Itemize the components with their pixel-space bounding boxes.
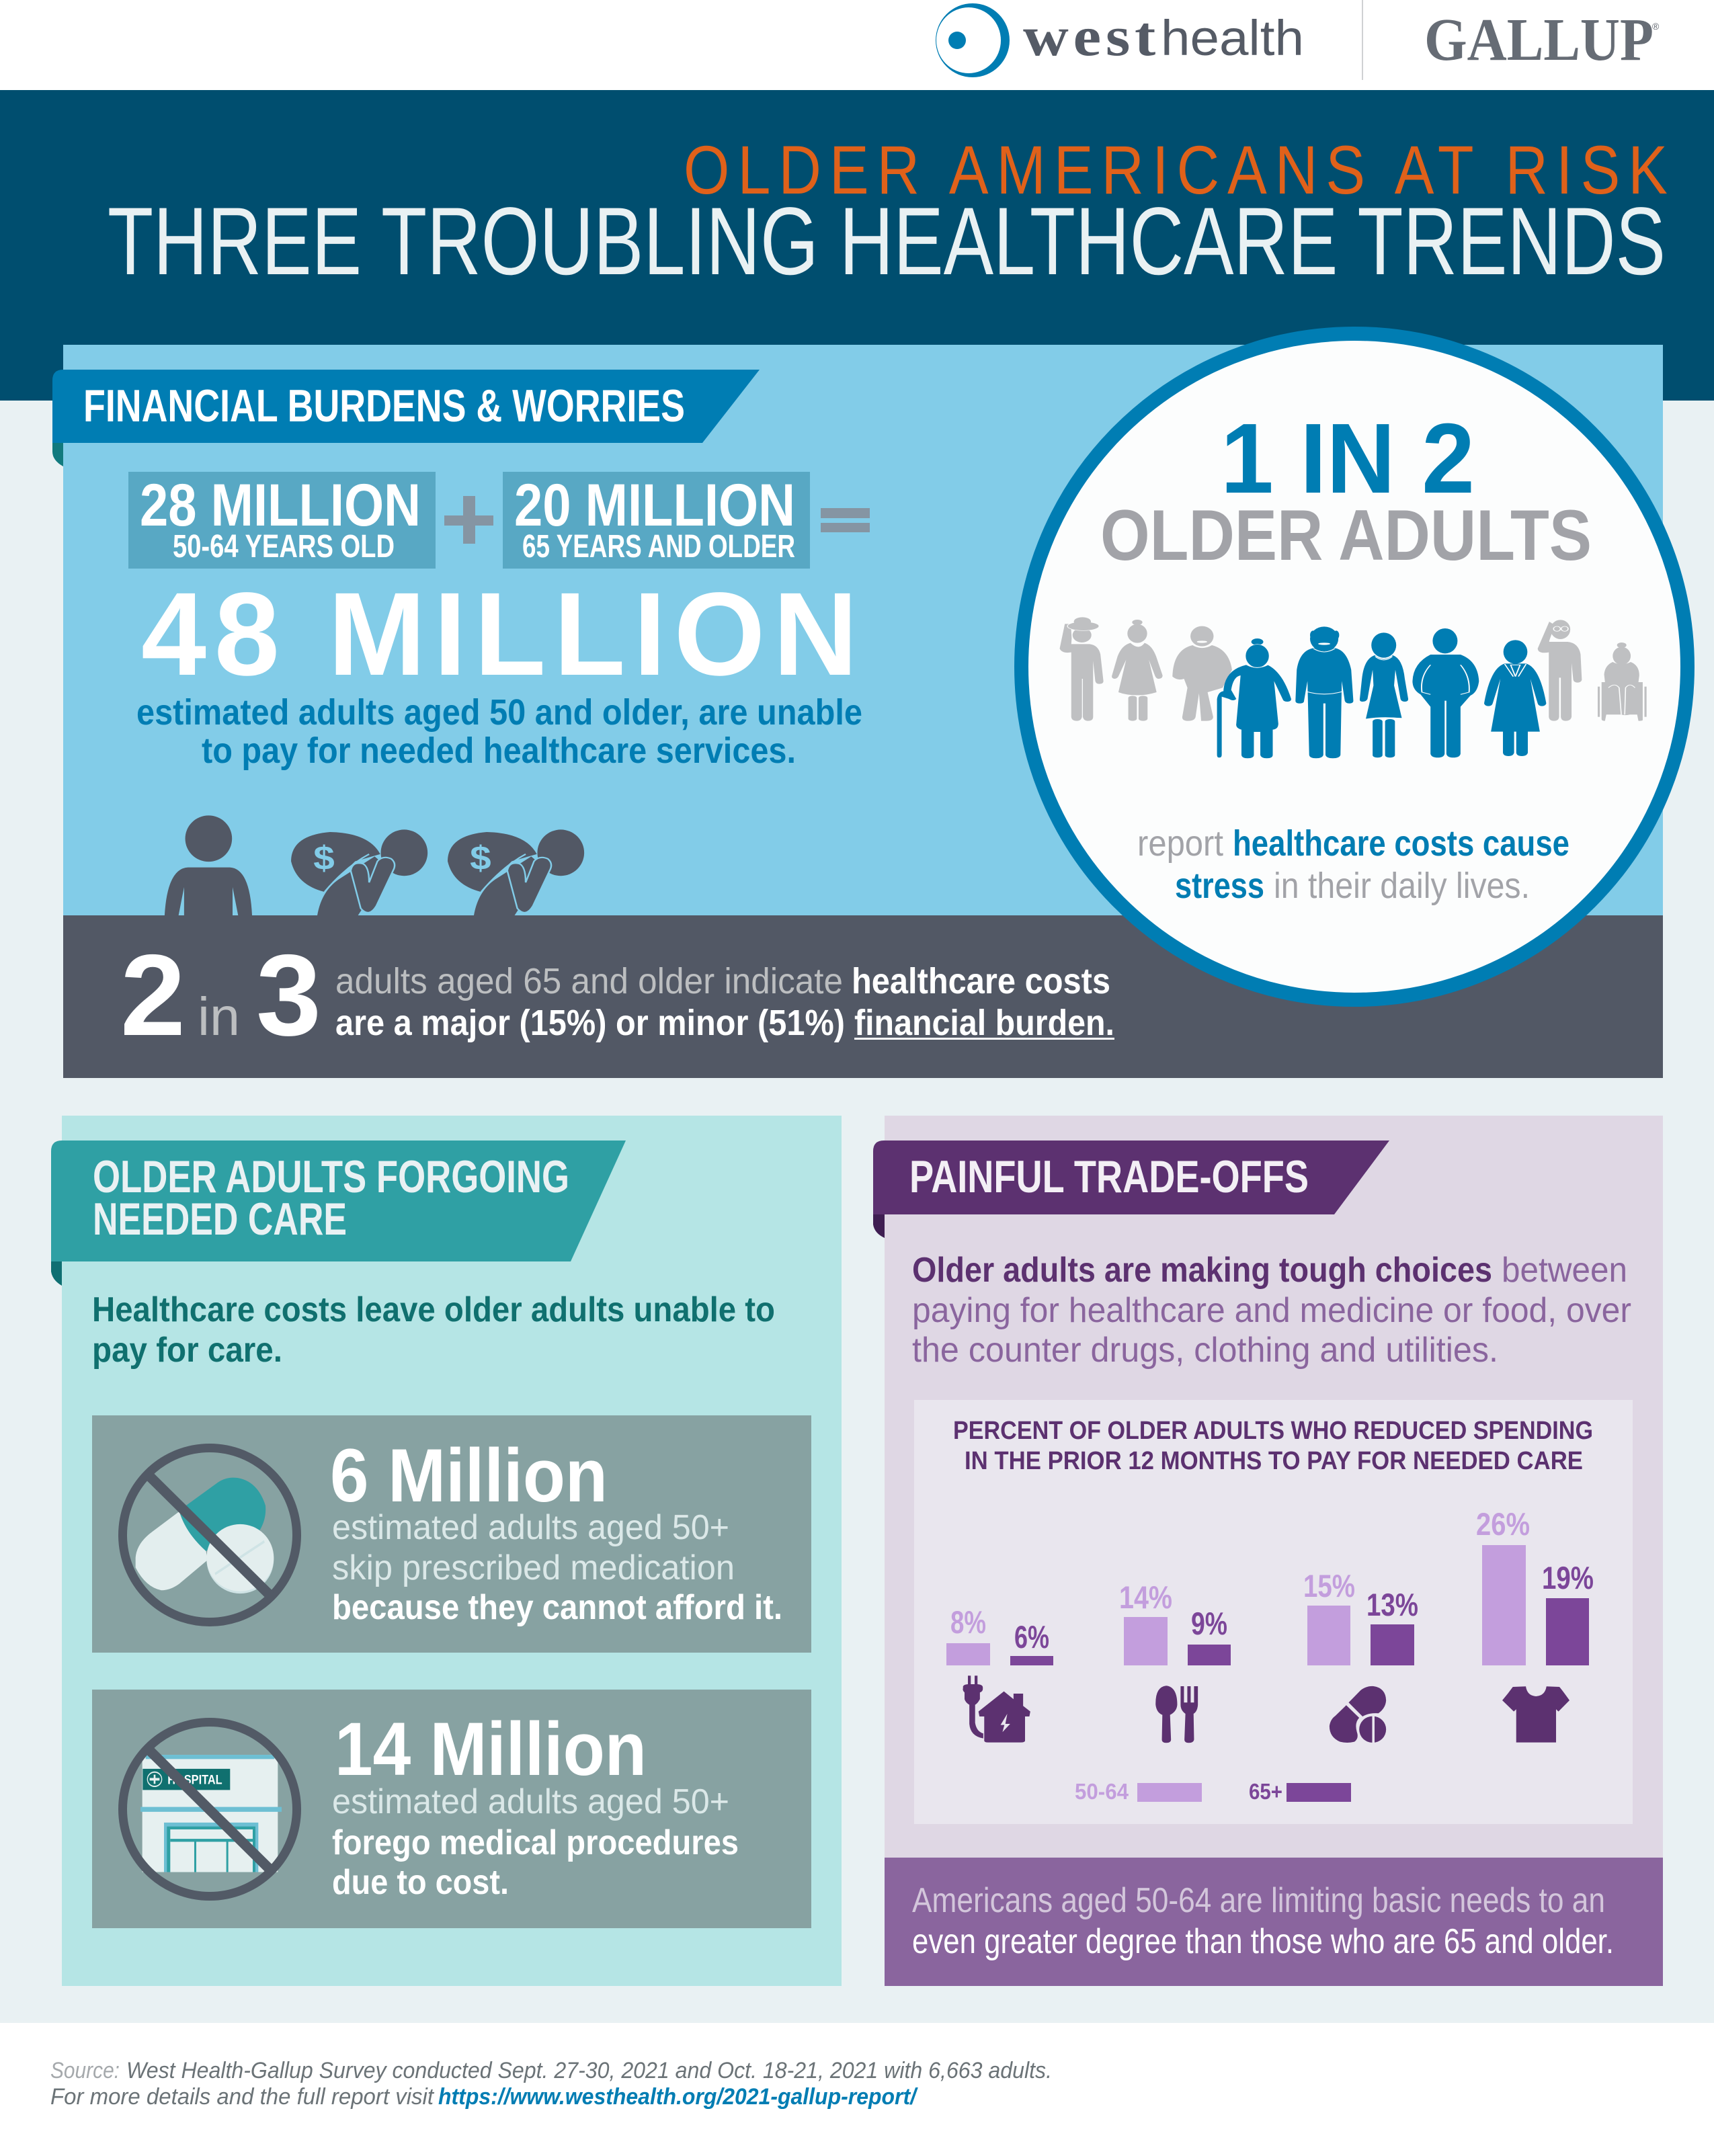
stat: 6 million: 6 Million [330, 1434, 608, 1518]
bar values: 15% [1303, 1568, 1355, 1604]
stat box: 28 million: 50-64 YEARS OLD [173, 529, 395, 565]
dark band: 2 in 3: 3 [256, 931, 321, 1060]
logo: Gallup: GALLUP [1424, 7, 1654, 73]
text: procedures: estimated adults aged 50+ [332, 1782, 729, 1821]
icon: utilities [963, 1675, 1030, 1743]
icon: food [1155, 1686, 1198, 1743]
icon: person and two people carrying money bags: $ [313, 839, 335, 877]
text: medication: skip prescribed medication [332, 1548, 735, 1587]
icon: person and two people carrying money bags [165, 815, 584, 915]
bar values: 14% [1119, 1579, 1172, 1615]
footer: source [0, 2023, 1714, 2156]
text: forgoing intro [92, 1290, 775, 1370]
chart title: IN THE PRIOR 12 MONTHS TO PAY FOR NEEDED CARE [965, 1447, 1583, 1475]
text: trade-offs intro: between [1502, 1251, 1627, 1290]
logo: Gallup: ® [1652, 21, 1660, 32]
icon: person and two people carrying money bags: $ [470, 839, 491, 877]
text: procedures: due to cost. [332, 1863, 509, 1902]
bar values [950, 1506, 1594, 1655]
panel: painful trade-offs [873, 1116, 1663, 1986]
stat box: 20 million: 20 MILLION [514, 471, 795, 538]
header band [0, 90, 1714, 401]
callout: basic needs [885, 1858, 1663, 1986]
logo: West Health: west [1023, 5, 1160, 68]
text: stress description [1137, 823, 1569, 906]
text: stress description: report [1137, 823, 1223, 864]
icon: clothing [1502, 1686, 1569, 1743]
text: procedures [332, 1782, 739, 1902]
plus sign [444, 496, 493, 544]
bar values: 19% [1542, 1560, 1594, 1595]
legend [1075, 1779, 1351, 1804]
text: trade-offs intro: paying for healthcare and medicine or food, over [912, 1291, 1631, 1330]
logo: West Health: health [1161, 10, 1304, 66]
chart title [953, 1417, 1593, 1475]
panel: financial burdens [52, 345, 1663, 1078]
dark band: 2 in 3: financial burden. [854, 1003, 1114, 1043]
text: medication: estimated adults aged 50+ [332, 1508, 729, 1547]
panel: forgoing needed care [51, 1116, 842, 1986]
chart: reduced spending by age group [914, 1400, 1633, 1824]
stat card: 6 million [92, 1415, 811, 1653]
callout: basic needs: Americans aged 50-64 are limiting basic needs to an [912, 1881, 1605, 1920]
footer: source: West Health-Gallup Survey conducted Sept. 27-30, 2021 and Oct. 18-21, 2021 with 6,663 adults. [126, 2058, 1052, 2083]
text: trade-offs intro: the counter drugs, clothing and utilities. [912, 1331, 1498, 1370]
icon: row of older adults [1060, 617, 1647, 758]
icon: hospital with prohibition sign [122, 1722, 297, 1897]
text: trade-offs intro: Older adults are making tough choices [912, 1251, 1492, 1290]
ribbon: forgoing needed care: NEEDED CARE [93, 1194, 347, 1245]
dark band: 2 in 3: 2 [120, 931, 186, 1060]
text: medication: because they cannot afford it. [332, 1588, 782, 1627]
bar values: 13% [1366, 1587, 1418, 1622]
bar values: 8% [950, 1604, 986, 1640]
circle callout: 1 in 2 [1022, 333, 1687, 1000]
footer: source: https://www.westhealth.org/2021-gallup-report/ [438, 2084, 918, 2110]
text: stress description: stress [1175, 866, 1264, 906]
text: medication [332, 1508, 782, 1627]
dark band: 2 in 3 [63, 915, 1663, 1078]
icon: pills with prohibition sign [122, 1448, 297, 1622]
text: procedures: forego medical procedures [332, 1823, 739, 1862]
ribbon: painful trade-offs [873, 1141, 1389, 1238]
stat box: 20 million: 65 YEARS AND OLDER [522, 529, 795, 565]
text: forgoing intro: pay for care. [92, 1331, 282, 1370]
bar values: 26% [1476, 1506, 1530, 1542]
stat: 14 million: 14 Million [335, 1707, 647, 1791]
dark band: 2 in 3: are a major (15%) or minor (51%) [335, 1003, 845, 1043]
text: stress description: healthcare costs cause [1233, 823, 1569, 864]
heading: 1 in 2: 1 IN 2 [1221, 403, 1475, 514]
ribbon: forgoing needed care [51, 1141, 626, 1286]
logo: West Health [936, 3, 1304, 77]
icon: over the counter drugs [1330, 1686, 1386, 1743]
text: stress description: in their daily lives. [1274, 866, 1530, 906]
ribbon: forgoing needed care: OLDER ADULTS FORGOING [93, 1151, 569, 1202]
ribbon: financial burdens [52, 370, 760, 466]
chart title: PERCENT OF OLDER ADULTS WHO REDUCED SPENDING [953, 1417, 1593, 1445]
ribbon: painful trade-offs: PAINFUL TRADE-OFFS [909, 1151, 1309, 1202]
heading: older adults: OLDER ADULTS [1100, 495, 1592, 575]
legend: 65+ [1249, 1779, 1282, 1804]
dark band: 2 in 3: adults aged 65 and older indicate [335, 961, 843, 1001]
stat box: 28 million: 28 MILLION [140, 471, 421, 538]
bar values: 9% [1191, 1606, 1227, 1641]
stat box: 20 million [503, 471, 810, 569]
text: 48 million description: to pay for needed healthcare services. [202, 731, 796, 771]
footer: source: For more details and the full report visit [50, 2084, 434, 2110]
ribbon: financial burdens: FINANCIAL BURDENS & WORRIES [83, 380, 685, 431]
dark band: 2 in 3: healthcare costs [852, 961, 1110, 1001]
text: 48 million description: estimated adults aged 50 and older, are unable [136, 692, 862, 733]
text: trade-offs intro [912, 1251, 1631, 1370]
stat box: 28 million [128, 471, 436, 569]
bars [946, 1545, 1589, 1665]
footer: source: Source: [50, 2058, 120, 2083]
equals sign [821, 508, 870, 532]
bar values: 6% [1014, 1619, 1049, 1655]
legend: 50-64 [1075, 1779, 1129, 1804]
text: forgoing intro: Healthcare costs leave older adults unable to [92, 1290, 775, 1329]
text: 48 million description [136, 692, 862, 771]
stat card: 14 million [92, 1690, 811, 1928]
big number: 48 million: 48 MILLION [141, 569, 866, 700]
icon: hospital with prohibition sign: HOSPITAL [167, 1772, 222, 1787]
dark band: 2 in 3: in [198, 987, 240, 1046]
